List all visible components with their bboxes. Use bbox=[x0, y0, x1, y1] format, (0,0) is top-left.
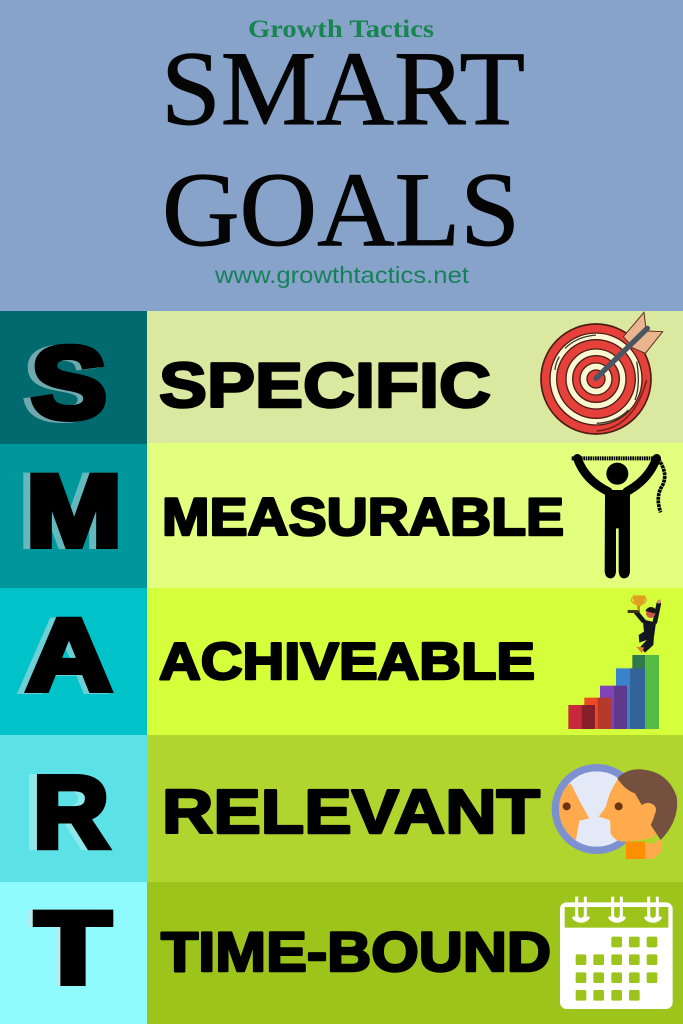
letter T: T bbox=[35, 891, 111, 1005]
row: T Time-Bound bbox=[0, 882, 683, 1024]
icon: person holding measuring tape bbox=[572, 458, 665, 578]
letter S: S bbox=[31, 326, 107, 440]
word: TIME-BOUND: TIME-BOUND bbox=[161, 920, 551, 983]
title line: GOALS: GOALS bbox=[162, 151, 520, 268]
header panel bbox=[0, 0, 683, 311]
letter A: A bbox=[26, 598, 112, 712]
title line: SMART: SMART bbox=[161, 30, 525, 147]
letter S: S bbox=[24, 327, 102, 441]
letter R: R bbox=[33, 755, 109, 869]
row: S Specific bbox=[0, 311, 683, 444]
icon: target with arrow bbox=[541, 312, 663, 434]
word: ACHIVEABLE: ACHIVEABLE bbox=[159, 633, 535, 691]
word: SPECIFIC: SPECIFIC bbox=[159, 351, 491, 421]
word: RELEVANT: RELEVANT bbox=[162, 778, 540, 847]
website url: www.growthtactics.net bbox=[214, 262, 470, 288]
icon: calendar bbox=[560, 897, 673, 1009]
icon: man facing mirror bbox=[555, 767, 677, 859]
letter A: A bbox=[19, 599, 107, 713]
brand name: Growth Tactics bbox=[248, 16, 434, 43]
letter R: R bbox=[25, 755, 103, 869]
row: M Measurable bbox=[0, 443, 683, 588]
winner figure bbox=[628, 595, 661, 653]
letter M: M bbox=[26, 454, 122, 568]
icon: rising bars with winner and trophy bbox=[568, 595, 661, 729]
row: R Relevant bbox=[0, 735, 683, 882]
letter M: M bbox=[19, 454, 115, 568]
letter T: T bbox=[29, 891, 107, 1005]
word: MEASURABLE: MEASURABLE bbox=[162, 488, 564, 547]
row: A Achievable bbox=[0, 588, 683, 735]
